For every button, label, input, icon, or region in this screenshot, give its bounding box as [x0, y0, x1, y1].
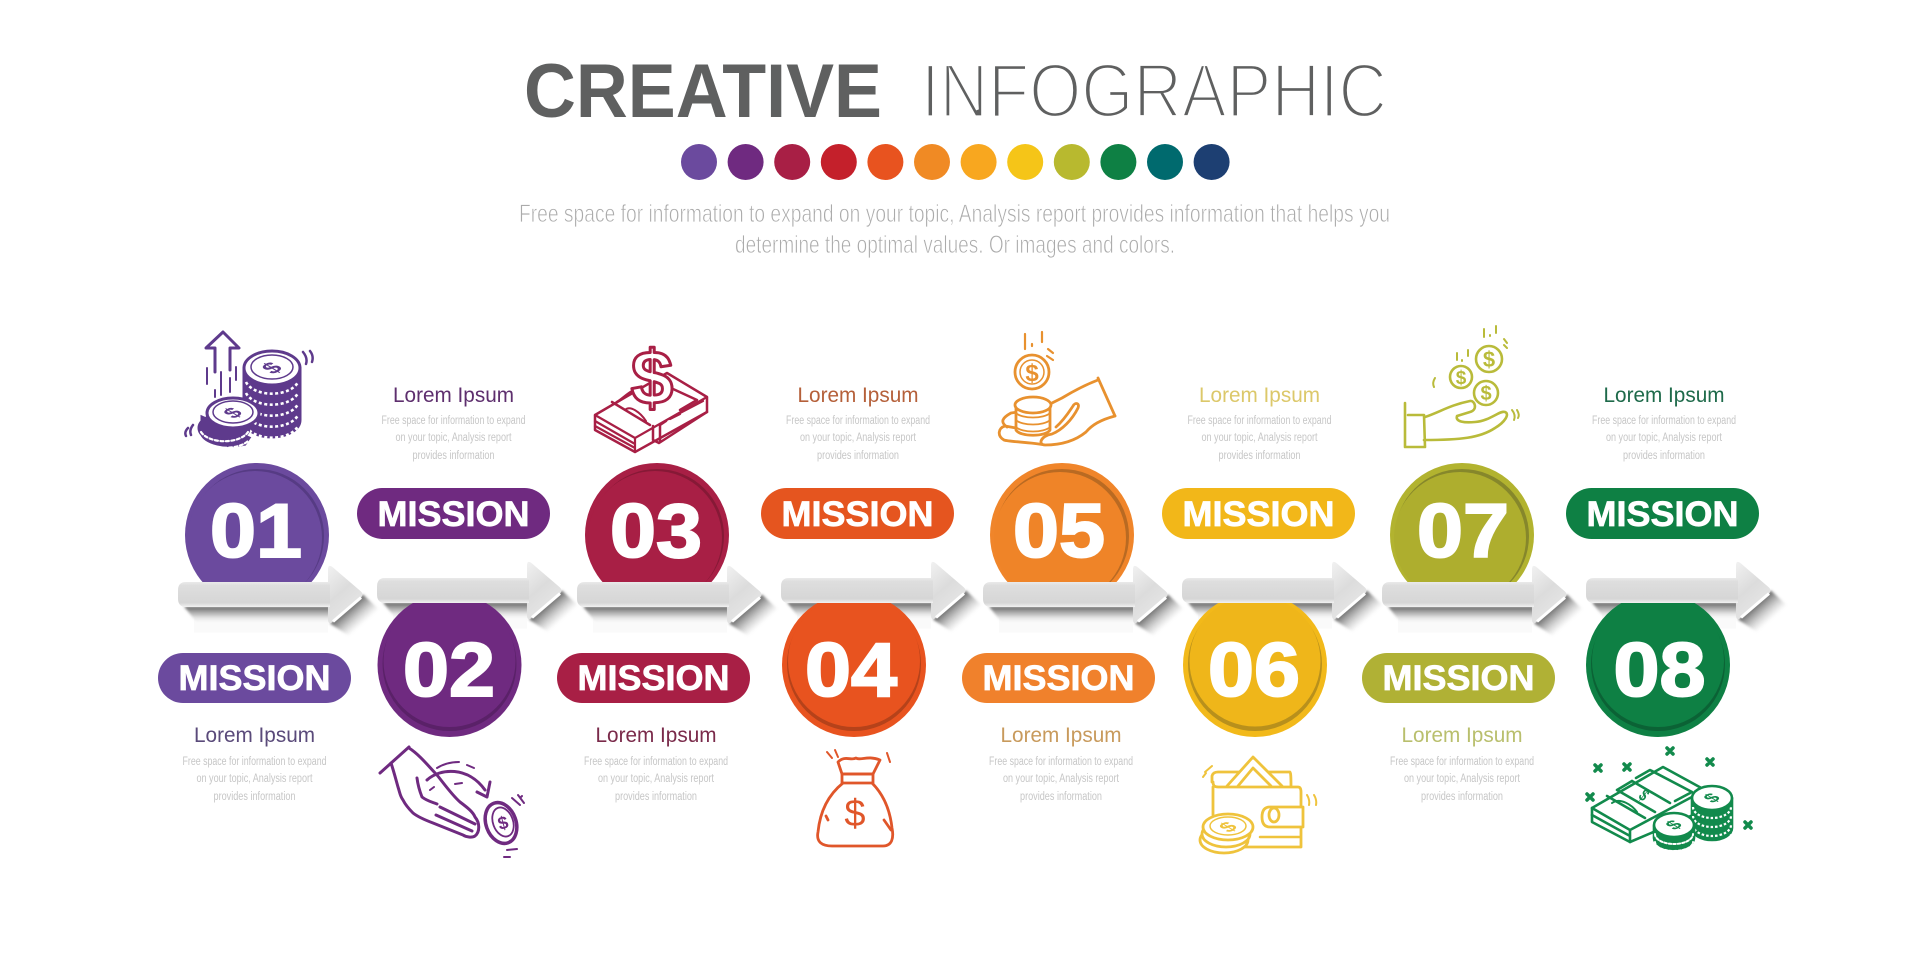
mission pill 05 — [962, 653, 1155, 703]
icon: cash bundle and coin stacks: $ — [1699, 790, 1725, 806]
mission pill 06 — [1162, 488, 1355, 539]
number 01: 01 — [210, 489, 302, 574]
description 04: on your topic, Analysis report — [800, 432, 917, 444]
icon: cash bundle and coin stacks: $ — [1634, 786, 1653, 806]
number 02: 02 — [403, 628, 495, 713]
icon: wallet and coins — [1200, 757, 1316, 853]
description 04: provides information — [817, 450, 899, 462]
description 03: on your topic, Analysis report — [598, 773, 715, 785]
description 08: Free space for information to expand — [1592, 415, 1736, 427]
description 07: on your topic, Analysis report — [1404, 773, 1521, 785]
description 06: Free space for information to expand — [1188, 415, 1332, 427]
description 03: Free space for information to expand — [584, 756, 728, 768]
number circle 06 — [1183, 593, 1327, 737]
description 05: Free space for information to expand — [989, 756, 1133, 768]
icon: hand catching coins: $ — [1480, 383, 1492, 405]
mission pill 03: MISSION — [578, 659, 730, 698]
number circle 04 — [782, 593, 926, 737]
number 06: 06 — [1208, 628, 1300, 713]
mission pill 01: MISSION — [178, 659, 330, 698]
heading 08: Lorem Ipsum — [1604, 384, 1724, 407]
icon: hand catching coins: $ — [1483, 347, 1495, 372]
description 08: provides information — [1623, 450, 1705, 462]
number circle 02 — [378, 593, 522, 737]
description 01 — [182, 756, 326, 803]
icon: rising coins — [185, 332, 313, 448]
description 02: Free space for information to expand — [382, 415, 526, 427]
number 07: 07 — [1417, 489, 1509, 574]
icon: hand catching coins: $ — [1456, 368, 1467, 389]
description 03 — [584, 756, 728, 803]
description 02 — [382, 415, 526, 462]
step 08 — [1566, 384, 1759, 851]
description 04: Free space for information to expand — [786, 415, 930, 427]
icon: cash bundle and coin stacks — [1587, 748, 1751, 851]
number circle 08 — [1586, 593, 1730, 737]
mission pill 08: MISSION — [1586, 495, 1738, 534]
icon: money bundle with dollar sign: $ — [631, 336, 673, 421]
icon: rising coins: $ — [256, 358, 288, 378]
subtitle text: determine the optimal values. Or images and colors. — [735, 231, 1175, 259]
step 01 — [158, 332, 351, 803]
arrow 6 — [1182, 562, 1366, 619]
mission pill 08 — [1566, 488, 1759, 539]
icon: money bundle with dollar sign — [595, 336, 707, 452]
arrow 7 — [1382, 566, 1566, 623]
colour dots row — [681, 144, 1230, 180]
number 05: 05 — [1013, 489, 1105, 574]
number 04: 04 — [805, 628, 897, 713]
mission pill 02: MISSION — [378, 495, 530, 534]
description 06 — [1188, 415, 1332, 462]
arrow 3 — [577, 566, 762, 623]
mission pill 05: MISSION — [982, 659, 1134, 698]
icon: money bag — [818, 750, 893, 846]
step 07 — [1362, 326, 1555, 803]
mission pill 02 — [357, 488, 550, 539]
arrow 2 — [377, 562, 562, 619]
icon: wallet and coins: $ — [1214, 819, 1243, 836]
step 04 — [761, 384, 954, 846]
description 03: provides information — [615, 791, 697, 803]
mission pill 03 — [557, 653, 750, 703]
arrow 8 — [1586, 562, 1770, 619]
icon: cash bundle and coin stacks: $ — [1661, 817, 1687, 833]
description 07: Free space for information to expand — [1390, 756, 1534, 768]
description 07 — [1390, 756, 1534, 803]
arrow 5 — [983, 566, 1168, 623]
description 01: Free space for information to expand — [182, 756, 326, 768]
heading 03: Lorem Ipsum — [596, 724, 716, 747]
icon: hand holding coins: $ — [1025, 360, 1039, 387]
number circle 05 — [990, 463, 1134, 582]
mission pill 07: MISSION — [1382, 659, 1534, 698]
description 06: on your topic, Analysis report — [1202, 432, 1318, 444]
heading 07: Lorem Ipsum — [1402, 724, 1522, 747]
heading 04: Lorem Ipsum — [798, 384, 918, 407]
step 02 — [357, 384, 550, 857]
description 08 — [1592, 415, 1736, 462]
title — [524, 49, 1387, 134]
description 04 — [786, 415, 930, 462]
icon: rising coins: $ — [218, 404, 248, 422]
step 03 — [557, 336, 750, 803]
description 05: on your topic, Analysis report — [1003, 773, 1120, 785]
heading 06: Lorem Ipsum — [1199, 384, 1320, 407]
description 01: on your topic, Analysis report — [196, 773, 313, 785]
arrow 4 — [781, 562, 966, 619]
number 03: 03 — [610, 489, 702, 574]
arrow shadows — [184, 590, 1787, 636]
subtitle text: Free space for information to expand on your topic, Analysis report provides information that helps you — [519, 200, 1390, 228]
title: CREATIVE — [524, 49, 882, 134]
step 05 — [962, 332, 1155, 803]
description 06: provides information — [1218, 450, 1300, 462]
heading 05: Lorem Ipsum — [1000, 724, 1122, 747]
heading 02: Lorem Ipsum — [393, 384, 514, 407]
subtitle text — [519, 200, 1390, 259]
number circle 03 — [585, 463, 729, 582]
description 02: provides information — [412, 450, 494, 462]
number circle 07 — [1390, 463, 1534, 582]
icon: hand catching coins — [1405, 326, 1519, 447]
number 08: 08 — [1614, 628, 1706, 713]
arrow 1 — [178, 566, 362, 623]
description 07: provides information — [1421, 791, 1503, 803]
icon: hand dropping coin — [380, 747, 524, 857]
icon: money bag: $ — [844, 793, 866, 835]
description 08: on your topic, Analysis report — [1606, 432, 1723, 444]
heading 01: Lorem Ipsum — [194, 724, 315, 747]
description 05: provides information — [1020, 791, 1102, 803]
description 05 — [989, 756, 1133, 803]
mission pill 07 — [1362, 653, 1555, 703]
mission pill 01 — [158, 653, 351, 703]
title: INFOGRAPHIC — [921, 49, 1387, 134]
mission pill 06: MISSION — [1182, 495, 1334, 534]
icon: hand holding coins — [999, 332, 1115, 445]
arrows band — [178, 562, 1770, 623]
description 02: on your topic, Analysis report — [396, 432, 512, 444]
mission pill 04 — [761, 488, 954, 539]
mission pill 04: MISSION — [782, 495, 934, 534]
step 06 — [1162, 384, 1355, 853]
description 01: provides information — [214, 791, 296, 803]
icon: hand dropping coin: $ — [496, 812, 510, 834]
number circle 01 — [185, 463, 329, 582]
